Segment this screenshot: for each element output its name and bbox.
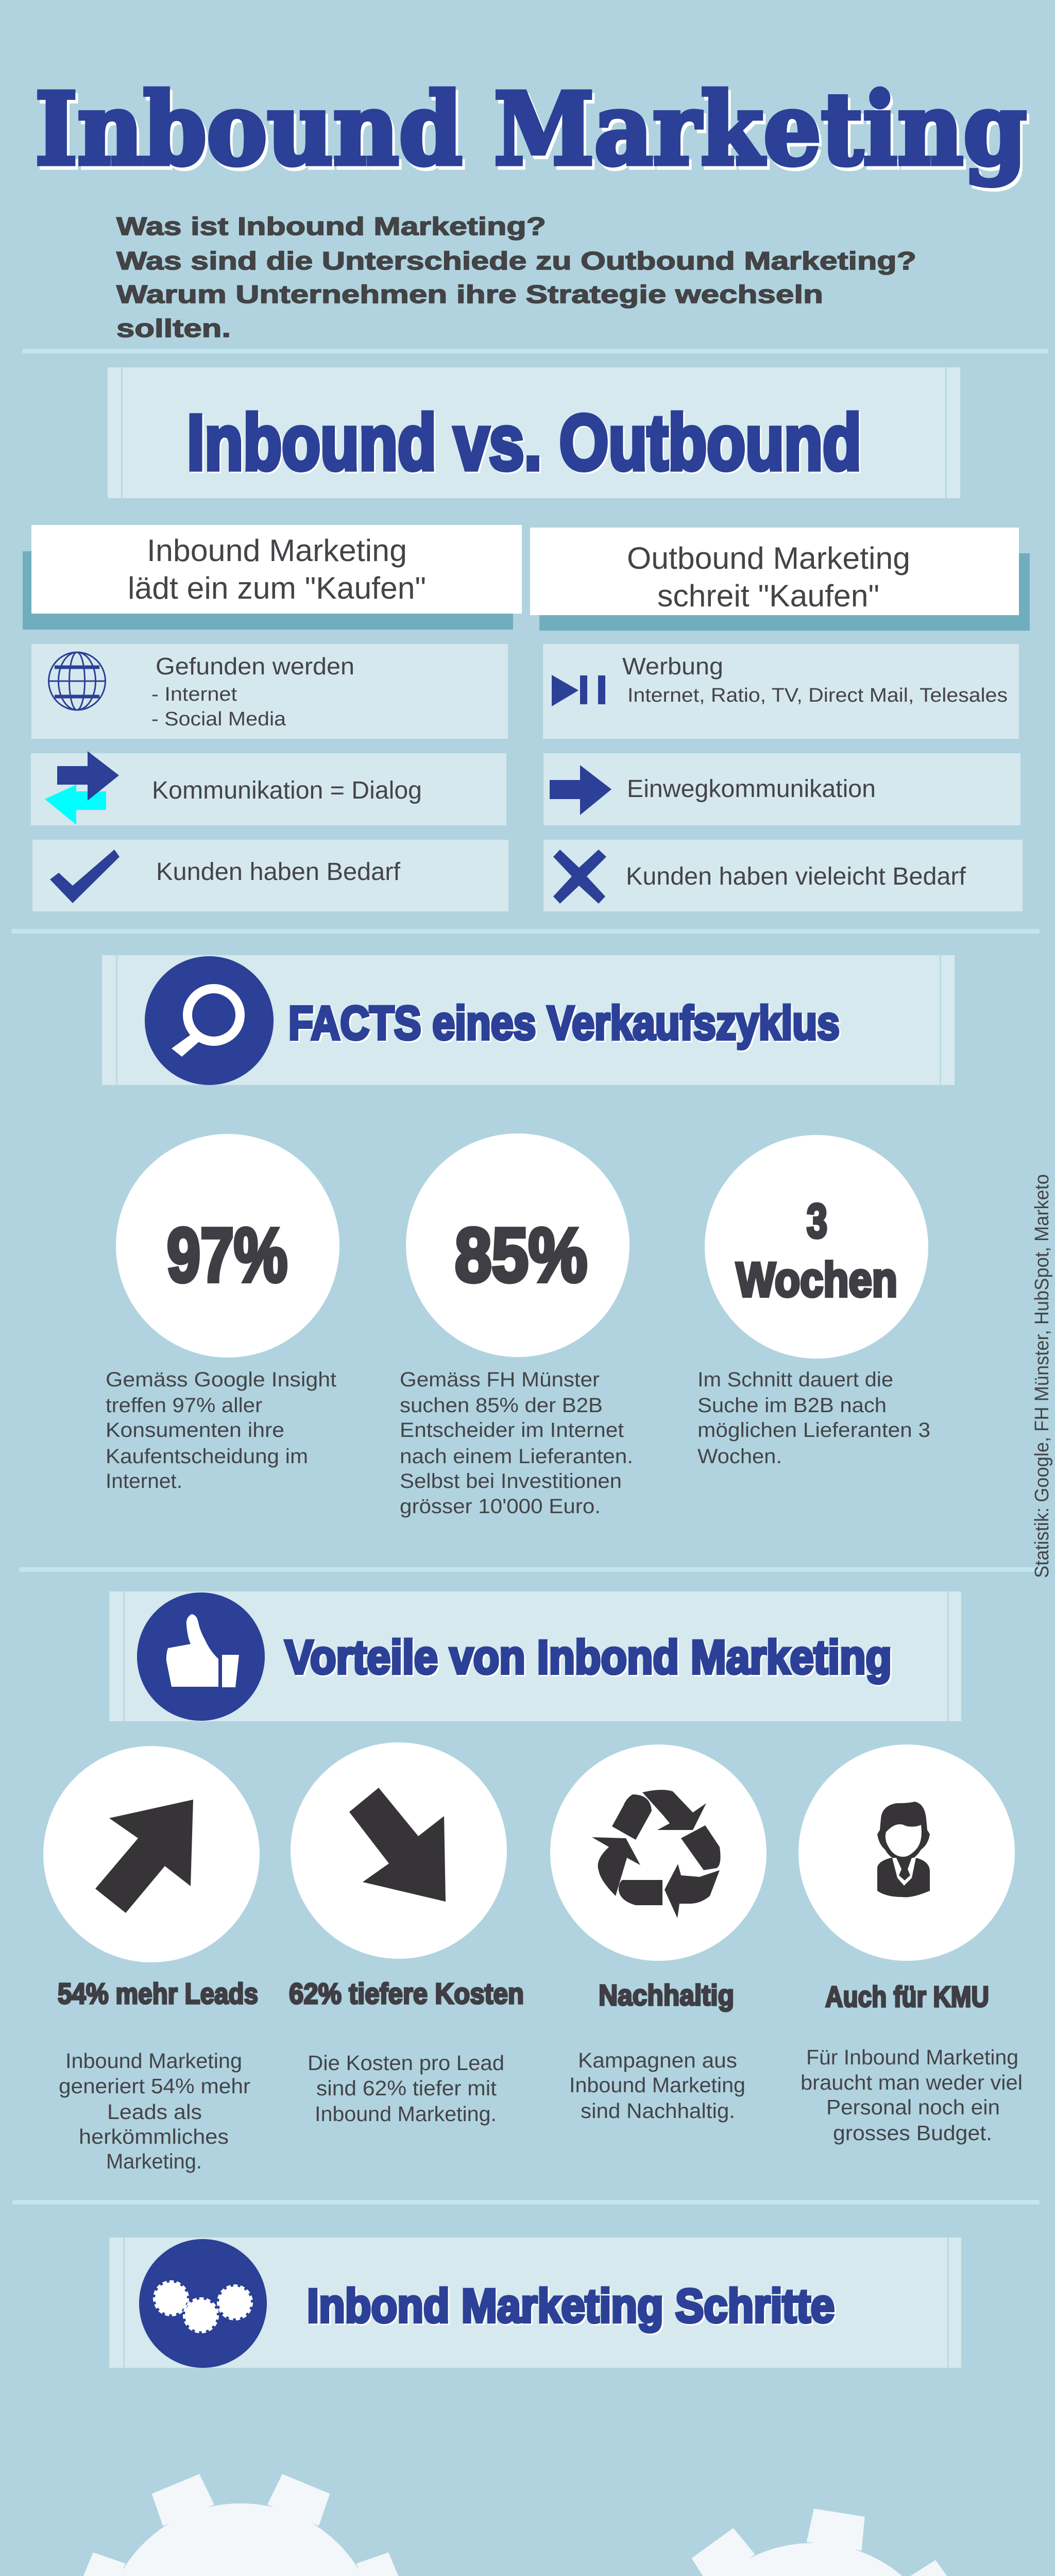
card: outbound marketing <box>530 528 1030 631</box>
card: outbound marketing: Outbound Marketing <box>627 541 910 575</box>
benefit: nachhaltig: Kampagnen aus <box>578 2048 737 2072</box>
stat: 85 percent <box>400 1133 633 1518</box>
row: kommunikation dialog: Kommunikation = Dialog <box>152 777 422 804</box>
card: inbound marketing <box>23 525 522 630</box>
benefit: nachhaltig: sind Nachhaltig. <box>581 2099 735 2123</box>
panel: inbound vs outbound banner <box>108 367 960 498</box>
benefit: 54 percent more leads <box>43 1746 260 2173</box>
stat: 85 percent: Entscheider im Internet <box>400 1419 624 1442</box>
stat: 97 percent: Konsumenten ihre <box>106 1419 284 1442</box>
stat: 3 wochen: Wochen. <box>697 1445 782 1468</box>
gear: software <box>640 2509 985 2576</box>
stat: 85 percent: suchen 85% der B2B <box>400 1394 603 1417</box>
icon: one-way arrow <box>550 765 611 815</box>
row: kunden haben bedarf: Kunden haben Bedarf <box>156 858 401 886</box>
panel: facts banner <box>102 955 955 1085</box>
icon: magnifier <box>145 956 274 1085</box>
row: gefunden werden <box>31 644 508 739</box>
benefit: auch fuer kmu: Personal noch ein <box>826 2095 1000 2119</box>
benefit: 54 percent more leads: Leads als <box>107 2100 202 2124</box>
gear: gefunden werden <box>73 2473 409 2576</box>
benefit: 62 percent lower costs: 62% tiefere Kosten <box>289 1977 524 2010</box>
panel: schritte banner <box>109 2238 961 2368</box>
row: kunden haben vielleicht bedarf: Kunden haben vieleicht Bedarf <box>626 863 966 890</box>
icon: recycle <box>592 1790 721 1918</box>
intro questions: Warum Unternehmen ihre Strategie wechseln <box>116 281 823 309</box>
icon: person <box>877 1802 930 1897</box>
benefit: auch fuer kmu: Auch für KMU <box>825 1980 989 2013</box>
intro questions: Was sind die Unterschiede zu Outbound Marketing? <box>116 247 916 275</box>
heading: schritte: Inbond Marketing Schritte <box>307 2280 835 2332</box>
row: werbung: Internet, Ratio, TV, Direct Mail, Telesales <box>627 685 1008 706</box>
card: inbound marketing: Inbound Marketing <box>147 533 407 568</box>
intro questions <box>116 213 916 343</box>
stat: 3 wochen: Wochen <box>736 1252 897 1307</box>
benefit: 62 percent lower costs <box>289 1742 524 2126</box>
benefit: auch fuer kmu: braucht man weder viel <box>801 2071 1023 2094</box>
icon: globe <box>48 652 105 710</box>
stat: 85 percent: Gemäss FH Münster <box>400 1368 600 1391</box>
row: gefunden werden: - Internet <box>151 684 237 705</box>
row: einwegkommunikation: Einwegkommunikation <box>627 775 876 803</box>
benefit: 54 percent more leads: generiert 54% mehr <box>59 2074 250 2098</box>
row: gefunden werden: - Social Media <box>151 708 286 730</box>
icon: cross <box>553 850 606 904</box>
icon: arrow up right <box>95 1800 193 1913</box>
row: gefunden werden: Gefunden werden <box>156 653 354 680</box>
intro questions: sollten. <box>116 315 231 343</box>
icon: gears <box>139 2239 267 2368</box>
source note: Statistik: Google, FH Münster, HubSpot, Marketo <box>1031 1174 1053 1578</box>
icon: two-way arrows <box>45 751 119 825</box>
heading: vorteile: Vorteile von Inbond Marketing <box>285 1631 892 1684</box>
row: werbung <box>543 644 1019 739</box>
stat: 85 percent: Selbst bei Investitionen <box>400 1470 622 1493</box>
benefit: auch fuer kmu <box>798 1744 1023 2145</box>
stat: 85 percent: 85% <box>455 1213 587 1298</box>
benefit: 54 percent more leads: Inbound Marketing <box>65 2049 242 2073</box>
benefit: 54 percent more leads: 54% mehr Leads <box>58 1977 258 2010</box>
heading: inbound vs outbound: Inbound vs. Outbound <box>187 399 861 486</box>
heading: facts: FACTS eines Verkaufszyklus <box>288 997 840 1049</box>
icon: play pause <box>552 675 605 706</box>
stat: 3 wochen: Im Schnitt dauert die <box>697 1368 893 1391</box>
card: inbound marketing: lädt ein zum "Kaufen" <box>128 571 426 605</box>
intro questions: Was ist Inbound Marketing? <box>116 213 546 241</box>
panel: vorteile banner <box>109 1591 961 1721</box>
row: einwegkommunikation <box>543 753 1020 825</box>
stat: 97 percent: Internet. <box>106 1470 182 1493</box>
benefit: nachhaltig <box>550 1744 767 2123</box>
stat: 3 wochen: 3 <box>807 1194 827 1248</box>
card: outbound marketing: schreit "Kaufen" <box>657 579 879 613</box>
benefit: 62 percent lower costs: sind 62% tiefer mit <box>316 2076 497 2100</box>
stat: 97 percent: treffen 97% aller <box>106 1394 262 1417</box>
stat: 85 percent: grösser 10'000 Euro. <box>400 1495 601 1518</box>
stat: 3 wochen: Suche im B2B nach <box>697 1394 887 1417</box>
stat: 97 percent: 97% <box>167 1213 287 1298</box>
stat: 97 percent <box>106 1134 339 1493</box>
row: kunden haben vielleicht bedarf <box>543 840 1023 911</box>
benefit: auch fuer kmu: grosses Budget. <box>833 2121 992 2145</box>
benefit: nachhaltig: Nachhaltig <box>599 1979 734 2012</box>
row: werbung: Werbung <box>622 653 723 680</box>
icon: check mark <box>50 850 120 903</box>
icon: arrow down right <box>349 1788 446 1902</box>
benefit: 62 percent lower costs: Inbound Marketing. <box>315 2102 497 2126</box>
benefit: 54 percent more leads: herkömmliches <box>79 2125 229 2148</box>
benefit: 54 percent more leads: Marketing. <box>106 2149 202 2173</box>
benefit: 62 percent lower costs: Die Kosten pro Lead <box>308 2051 504 2075</box>
icon: thumbs up <box>137 1592 265 1721</box>
row: kommunikation dialog <box>31 751 506 825</box>
stat: 97 percent: Kaufentscheidung im <box>106 1445 308 1468</box>
benefit: auch fuer kmu: Für Inbound Marketing <box>806 2045 1018 2069</box>
stat: 97 percent: Gemäss Google Insight <box>106 1368 336 1391</box>
benefit: nachhaltig: Inbound Marketing <box>569 2073 745 2097</box>
stat: 3 wochen: möglichen Lieferanten 3 <box>697 1419 930 1442</box>
stat: 3 wochen <box>697 1135 930 1468</box>
stat: 85 percent: nach einem Lieferanten. <box>400 1445 633 1468</box>
row: kunden haben bedarf <box>32 840 508 911</box>
